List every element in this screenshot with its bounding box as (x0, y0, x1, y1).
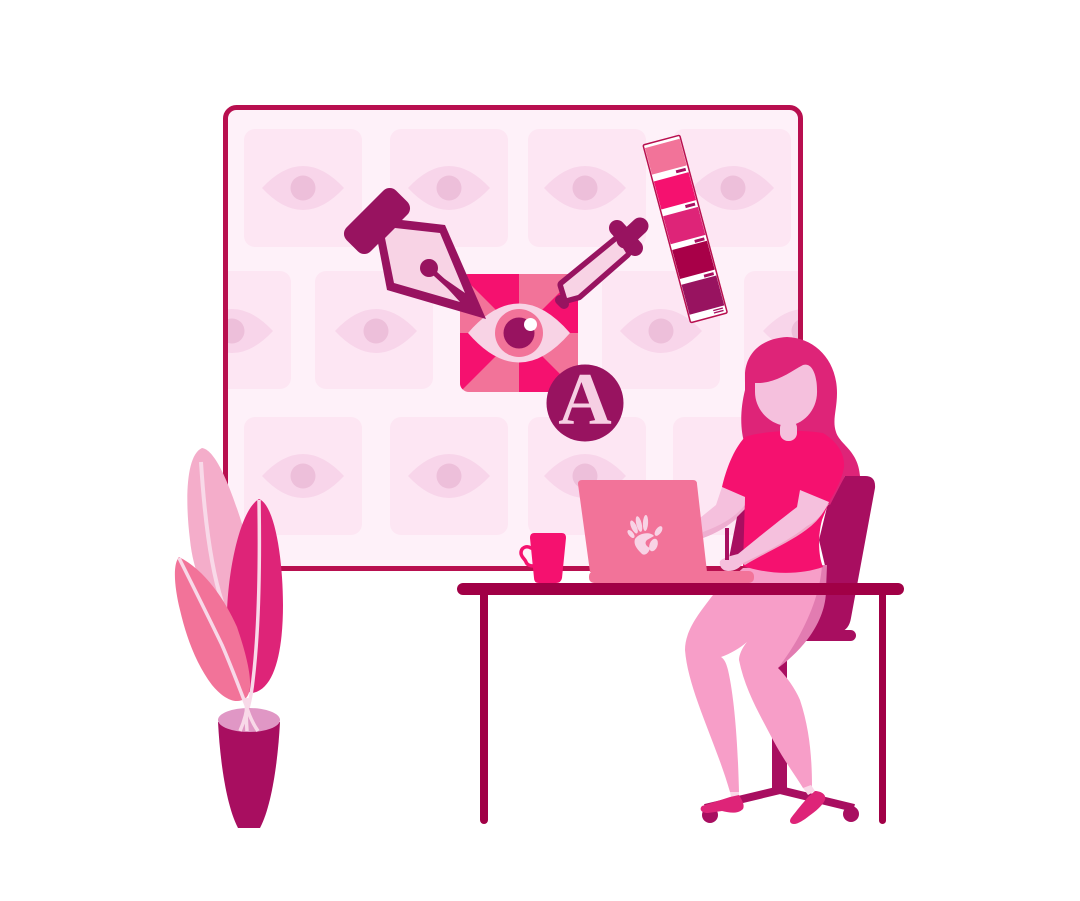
face (755, 365, 817, 426)
shoes (701, 791, 825, 824)
desk (457, 583, 904, 824)
chair (702, 476, 875, 823)
far arm (700, 487, 745, 538)
dark leaf (227, 499, 283, 731)
icon: eyedropper tool (560, 226, 640, 304)
panel: pattern board (223, 105, 803, 571)
plant (175, 448, 283, 828)
icon: eye app tile (460, 274, 578, 392)
pink leaf (175, 557, 250, 705)
icon: typography badge: A (558, 358, 612, 440)
icon: typography badge (546, 358, 624, 442)
laptop (578, 480, 754, 583)
near arm (720, 490, 829, 571)
person (685, 337, 860, 824)
light leaf (187, 448, 247, 625)
tile pattern of eyes (228, 129, 798, 535)
mug (521, 533, 566, 583)
legs (685, 565, 827, 797)
neck (780, 420, 797, 441)
pot (218, 698, 280, 828)
shirt (722, 431, 844, 573)
stylus (725, 528, 729, 560)
stylus and chair gap (729, 509, 745, 558)
icon: colour swatch strip (643, 135, 727, 323)
icon: pen nib tool (340, 184, 486, 319)
logo: hand (626, 515, 664, 555)
hair (741, 337, 860, 505)
